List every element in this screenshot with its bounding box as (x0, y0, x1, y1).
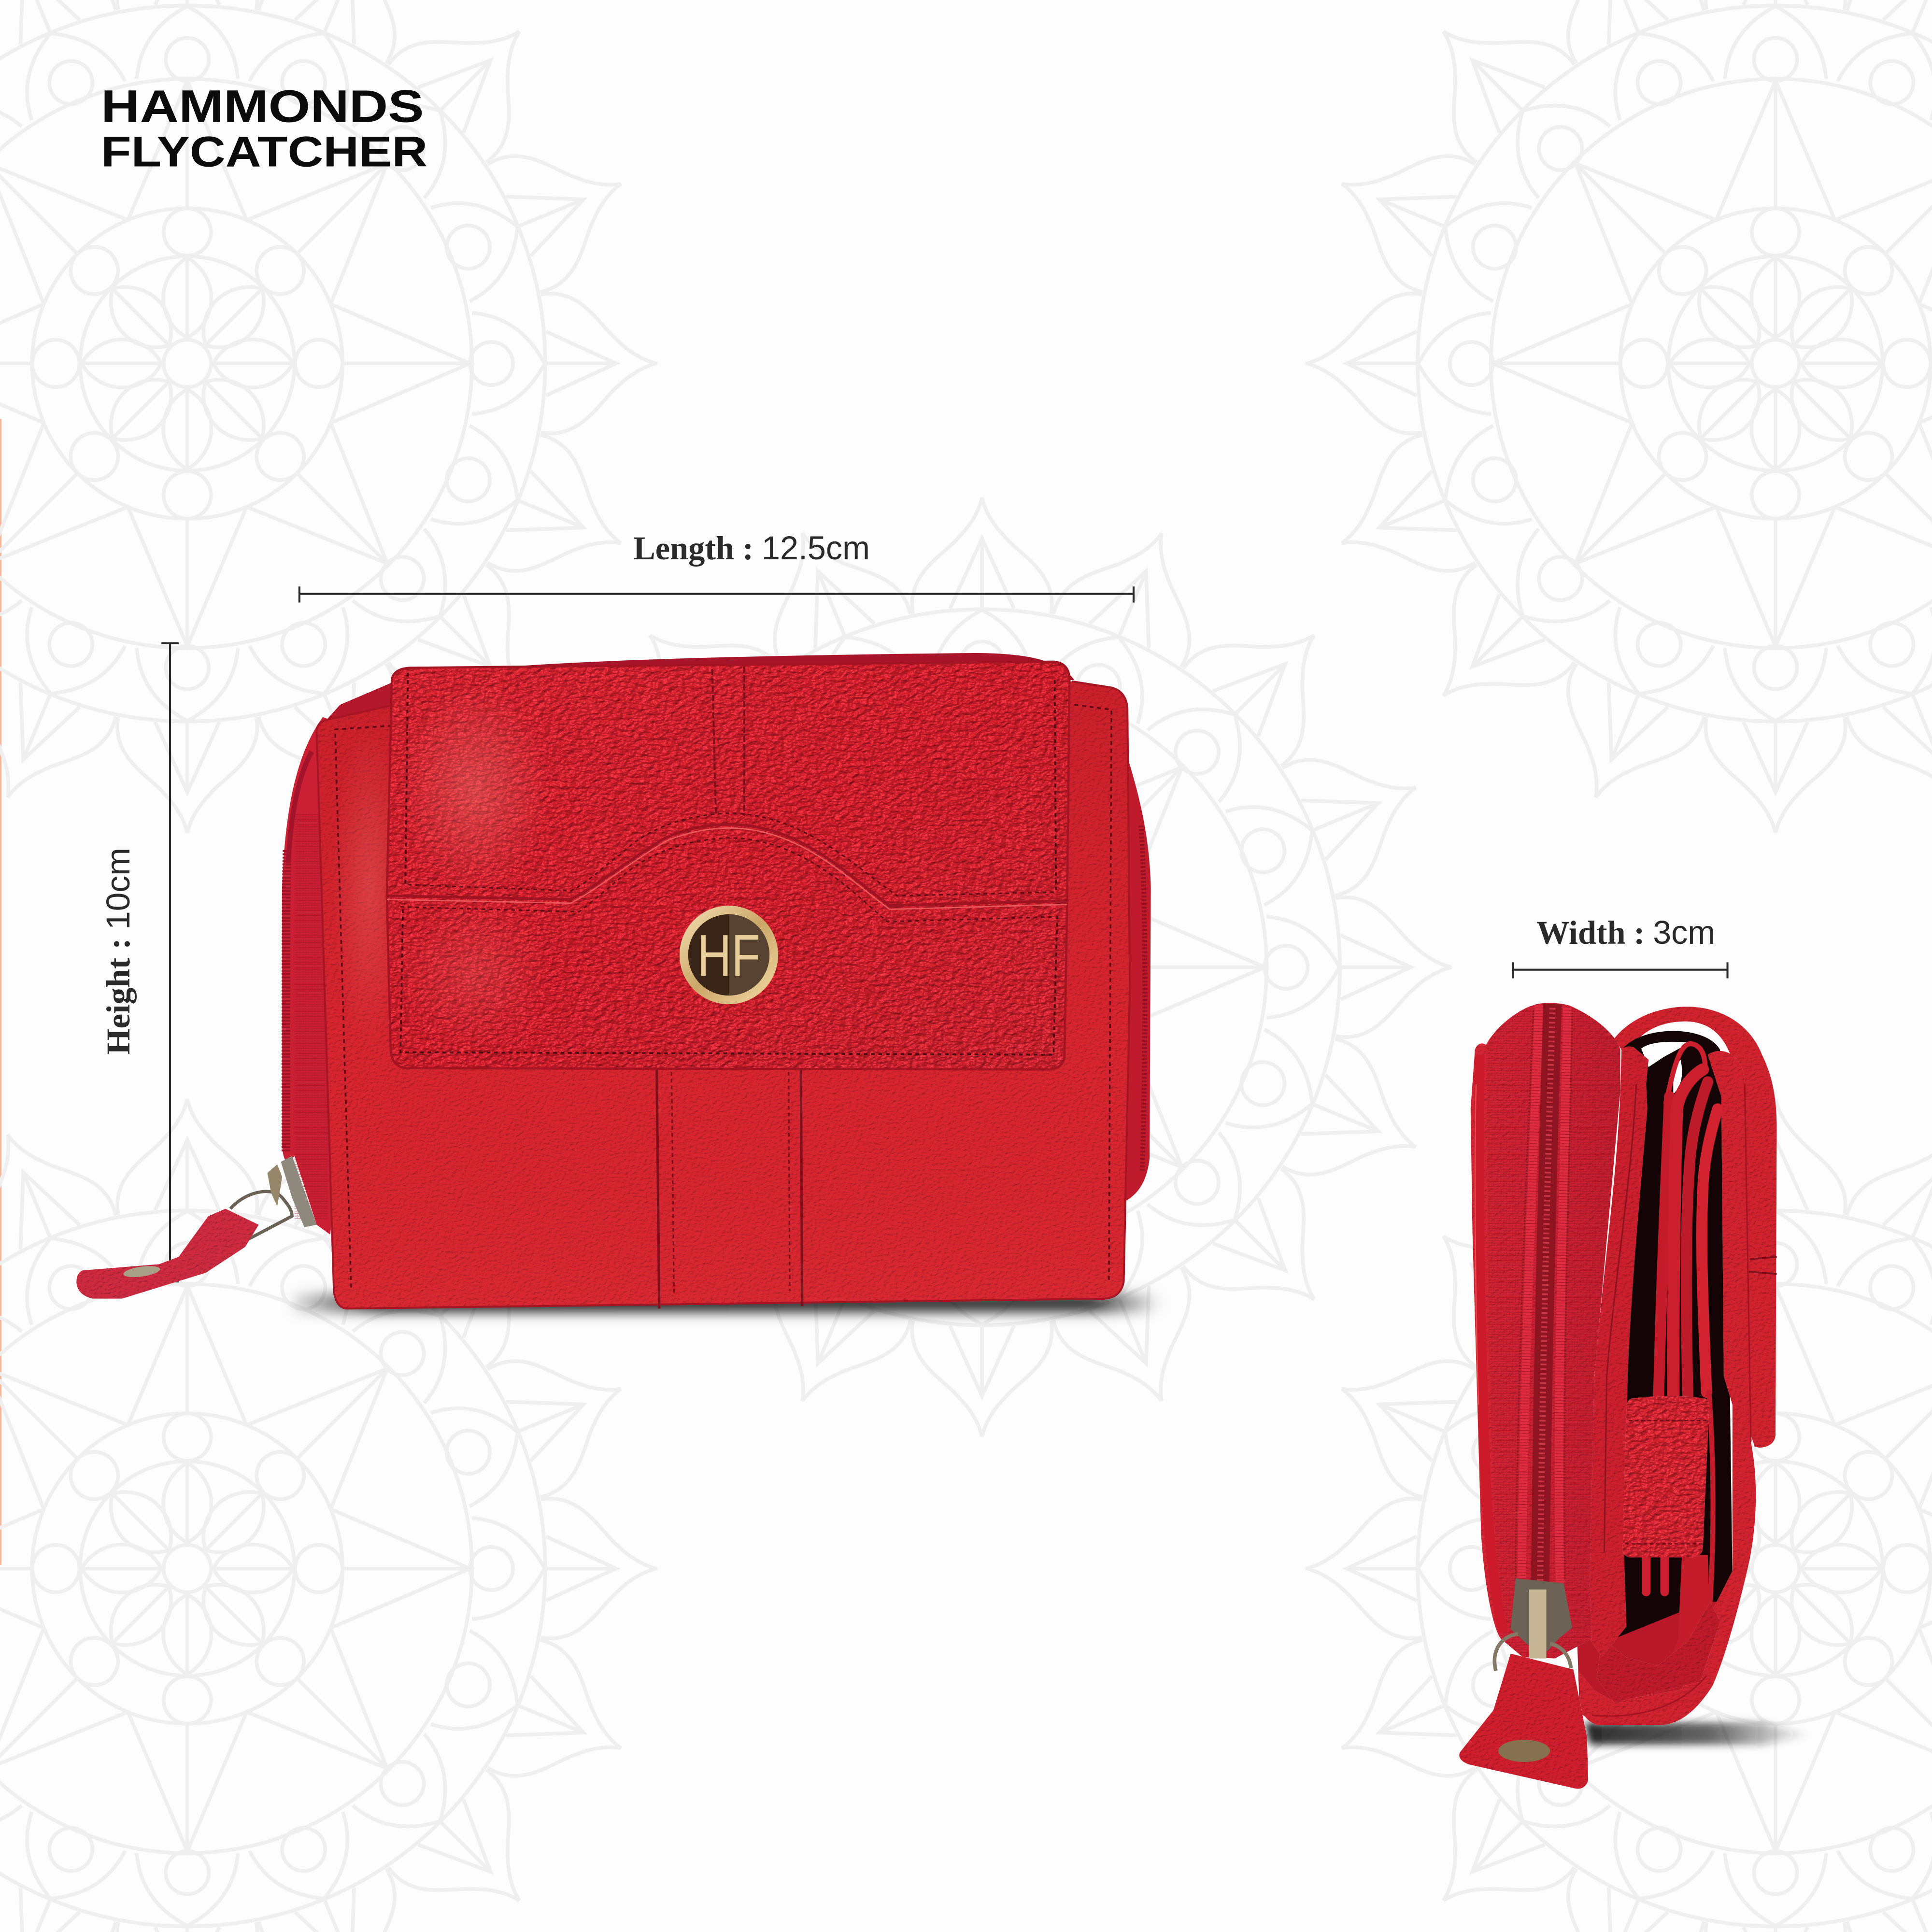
brand logo: HAMMONDS (101, 82, 424, 132)
brand logo (101, 82, 427, 175)
pocket sheet b (1666, 1044, 1705, 1103)
body edge (317, 682, 1130, 1308)
pocket sheet lines (1604, 1084, 1636, 1552)
arch stitching (400, 813, 1057, 922)
background mandala: top left (0, 0, 657, 834)
background mandala: centre (512, 498, 1451, 1436)
tag snap (123, 1264, 161, 1279)
pocket sheet c (1673, 1069, 1703, 1405)
zip ring (230, 1192, 292, 1239)
brand medallion: HF (697, 922, 760, 988)
pocket sheet e lower (1709, 1392, 1713, 1602)
side edge piping (1479, 1055, 1503, 1633)
pull piece (268, 1165, 282, 1206)
length label: Length : 12.5cm (633, 529, 870, 567)
body left shine (333, 727, 407, 1047)
strap tails (1646, 1555, 1664, 1592)
top centre strap (712, 667, 744, 816)
flap stitching (400, 673, 1057, 1055)
body stitching (335, 705, 1111, 1291)
flap highlight upper left (400, 684, 548, 893)
width measure line (1513, 962, 1728, 979)
zipper dark centre (1540, 1004, 1552, 1583)
brand logo: FLYCATCHER (101, 127, 427, 175)
main side body (1471, 1003, 1620, 1659)
zipper light rows (1522, 1006, 1567, 1583)
background mandala: bottom left (0, 1098, 657, 1932)
right zip band (1115, 721, 1151, 1203)
background mandala: top right (1306, 0, 1932, 834)
side shadow (1585, 1722, 1811, 1745)
top zip band (456, 653, 1074, 680)
cloth weave (1486, 1006, 1620, 1659)
front view wallet (76, 653, 1161, 1312)
brand medallion (680, 906, 778, 1004)
card pockets (1646, 1044, 1718, 1602)
back panel edge (1592, 1084, 1751, 1716)
width label: Width : 3cm (1536, 914, 1715, 951)
upper left zip run (318, 682, 402, 729)
flap seam marks (1747, 1257, 1777, 1274)
pocket floor (1597, 1602, 1720, 1703)
background mandala: bottom right (1306, 1098, 1932, 1932)
white gaps (1641, 1042, 1690, 1094)
left zip band (282, 717, 357, 1235)
arched seam (387, 824, 1067, 906)
zip pull (76, 1156, 317, 1299)
front pocket sheet (1590, 1047, 1648, 1657)
flap edge (387, 662, 1069, 1069)
length dimension (299, 529, 1134, 602)
pocket sheet e (1702, 1109, 1718, 1392)
side zip slider (1494, 1578, 1572, 1671)
lower right sheet (1663, 1555, 1710, 1678)
main body panel (317, 682, 1130, 1308)
lower fold backing (1577, 1602, 1725, 1725)
card strap (1622, 1396, 1709, 1557)
zipper edge rows (1516, 1010, 1572, 1579)
leather tag (76, 1209, 259, 1299)
zip slider (281, 1156, 317, 1227)
side leather tag (1459, 1653, 1588, 1789)
pocket sheet d (1686, 1082, 1708, 1405)
length measure line (299, 586, 1134, 602)
lower centre strap (657, 1067, 802, 1308)
width dimension (1513, 914, 1728, 979)
ground shadow (293, 1294, 1161, 1312)
back panel (1579, 1051, 1756, 1725)
height measure line (161, 643, 179, 1281)
body tonal shade (317, 682, 1130, 1308)
side view wallet (1459, 1003, 1811, 1789)
front flap (387, 662, 1069, 1069)
height dimension (99, 643, 179, 1281)
flap highlight lower left (400, 899, 548, 1047)
inner compartment (1596, 1031, 1733, 1688)
zipper teeth (1540, 1008, 1552, 1583)
side flap (1614, 1007, 1777, 1448)
height label: Height : 10cm (99, 848, 137, 1055)
tag snap (1498, 1740, 1550, 1762)
